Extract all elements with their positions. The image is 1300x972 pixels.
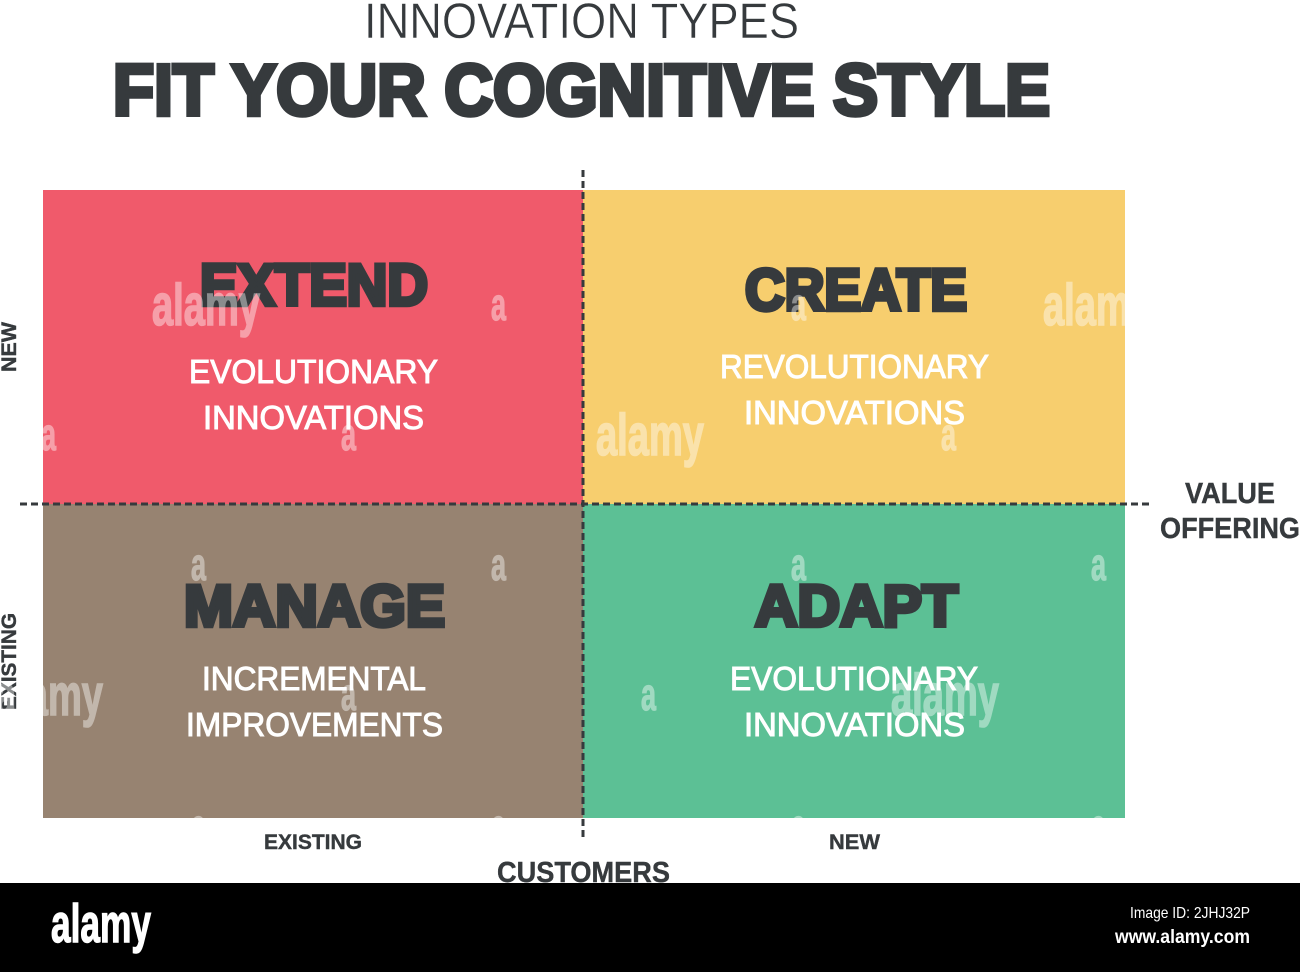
watermarks: a — [41, 409, 57, 460]
manage description — [186, 660, 443, 743]
watermarks — [0, 273, 1151, 851]
manage description: INCREMENTAL — [202, 660, 426, 697]
watermarks: a — [491, 800, 507, 851]
x axis label: new: NEW — [829, 831, 880, 854]
watermarks: a — [791, 800, 807, 851]
watermarks: alamy — [596, 403, 704, 468]
create background — [583, 190, 1125, 504]
adapt description: INNOVATIONS — [744, 706, 965, 743]
y axis title: value offering — [1160, 478, 1300, 545]
create heading: CREATE — [745, 258, 967, 323]
adapt background — [583, 504, 1125, 818]
watermarks: a — [791, 279, 807, 330]
image id: Image ID: 2JHJ32P — [1130, 905, 1250, 922]
footer logo: alamy: alamy — [51, 894, 151, 954]
website: www.alamy.com — [1114, 927, 1250, 948]
create description: INNOVATIONS — [744, 394, 965, 431]
extend description: INNOVATIONS — [203, 399, 424, 436]
watermarks: a — [191, 539, 207, 590]
watermarks: a — [341, 409, 357, 460]
watermarks: a — [641, 669, 657, 720]
extend description — [189, 353, 438, 436]
watermarks: alamy — [891, 663, 999, 728]
manage description: IMPROVEMENTS — [186, 706, 443, 743]
footer bar — [0, 883, 1300, 972]
extend heading: EXTEND — [200, 253, 428, 318]
panel: manage — [43, 504, 583, 818]
manage heading: MANAGE — [184, 574, 445, 639]
heading: fit your cognitive style: FIT YOUR COGNITIVE STYLE — [113, 51, 1050, 131]
watermarks: a — [1091, 539, 1107, 590]
watermarks: a — [491, 539, 507, 590]
adapt heading: ADAPT — [755, 574, 958, 639]
create description — [720, 348, 989, 431]
manage background — [43, 504, 583, 818]
watermarks: a — [1091, 800, 1107, 851]
watermarks: a — [791, 539, 807, 590]
adapt description: EVOLUTIONARY — [730, 660, 978, 697]
watermarks: a — [491, 279, 507, 330]
x axis title: customers: CUSTOMERS — [497, 857, 670, 889]
adapt description — [730, 660, 978, 743]
create description: REVOLUTIONARY — [720, 348, 989, 385]
panel: create — [583, 190, 1125, 504]
watermarks: alamy — [1043, 273, 1151, 338]
extend description: EVOLUTIONARY — [189, 353, 438, 390]
extend background — [43, 190, 583, 504]
y axis title: value offering: VALUE — [1185, 478, 1275, 510]
watermarks: a — [191, 800, 207, 851]
watermarks: a — [941, 409, 957, 460]
panel: adapt — [583, 504, 1125, 818]
x axis label: existing: EXISTING — [264, 831, 362, 854]
panel: extend — [43, 190, 583, 504]
watermarks: a — [341, 669, 357, 720]
watermarks: alamy — [152, 273, 260, 338]
